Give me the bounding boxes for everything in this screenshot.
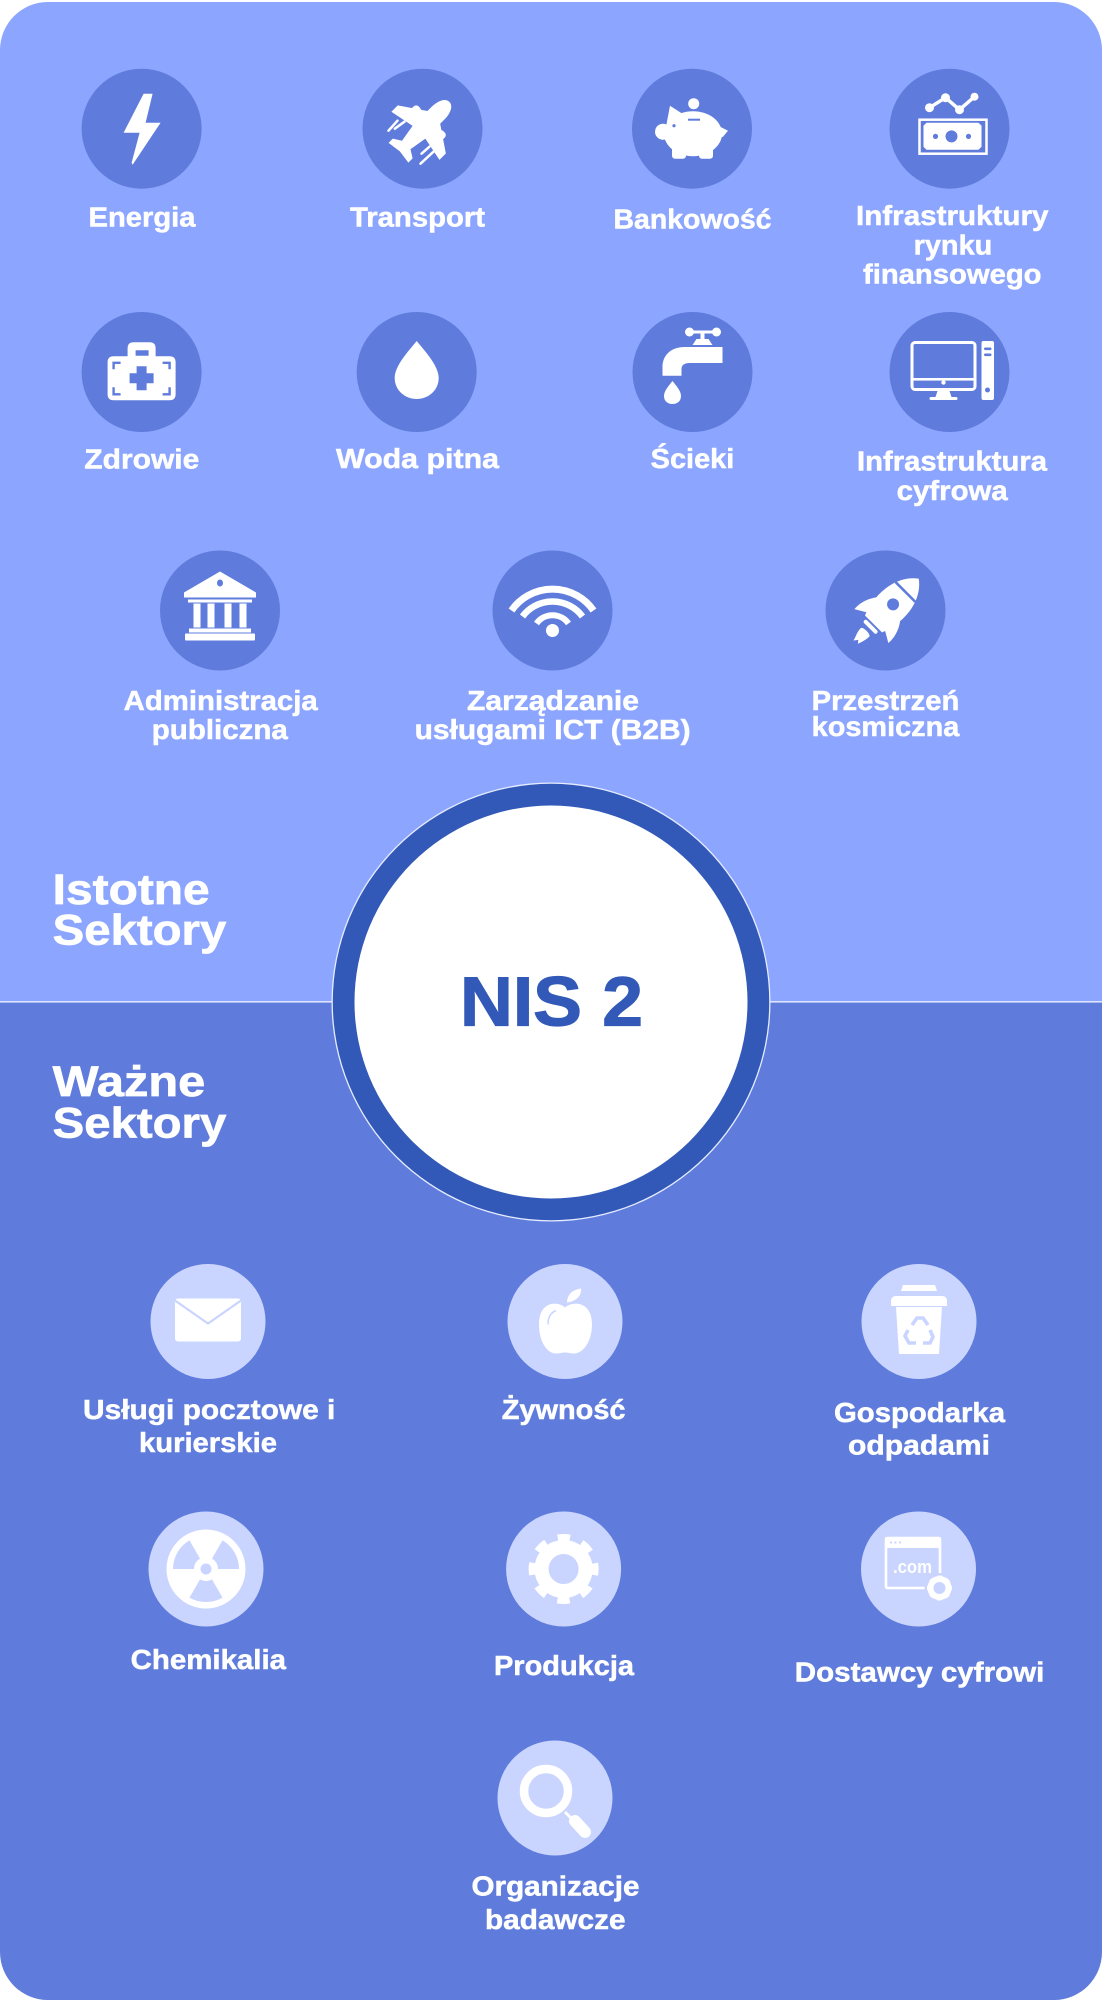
label: Zdrowie: Zdrowie xyxy=(84,444,199,475)
label: Usługi pocztowe i kurierskie: kurierskie xyxy=(139,1427,277,1458)
label: Organizacje badawcze: Organizacje xyxy=(472,1870,640,1901)
label: Gospodarka odpadami: odpadami xyxy=(848,1430,990,1461)
heading: Istotne Sektory: Istotne xyxy=(53,866,210,914)
icon: .com browser window with gear: .com xyxy=(893,1557,932,1577)
label: Organizacje badawcze xyxy=(472,1870,640,1935)
label: Zarządzanie usługami ICT (B2B): usługami ICT (B2B) xyxy=(415,714,691,745)
icon: medical kit xyxy=(108,342,176,400)
icon: radiation symbol xyxy=(166,1530,246,1608)
label: Bankowość: Bankowość xyxy=(614,204,772,235)
icon: lightning bolt xyxy=(124,94,161,165)
item: Ścieki xyxy=(632,312,752,474)
label: Usługi pocztowe i kurierskie xyxy=(83,1394,335,1458)
label: Infrastruktura cyfrowa: Infrastruktura xyxy=(857,446,1048,477)
item: Żywność xyxy=(502,1264,626,1425)
label: Infrastruktury rynku finansowego xyxy=(856,200,1049,290)
item: Przestrzeń kosmiczna xyxy=(812,550,960,742)
label: Usługi pocztowe i kurierskie: Usługi pocztowe i xyxy=(83,1394,335,1425)
item: Gospodarka odpadami xyxy=(834,1264,1006,1461)
icon: rocket xyxy=(838,562,936,659)
icon: public building xyxy=(184,572,256,640)
heading: Ważne Sektory xyxy=(53,1058,226,1148)
icon: recycling bin xyxy=(891,1285,947,1354)
item: Chemikalia xyxy=(131,1512,287,1675)
label: Zarządzanie usługami ICT (B2B) xyxy=(415,685,691,745)
label: Administracja publiczna xyxy=(124,685,318,745)
label: Dostawcy cyfrowi: Dostawcy cyfrowi xyxy=(795,1657,1044,1688)
item: Zdrowie xyxy=(82,312,202,475)
central badge: NIS 2 xyxy=(332,782,770,1222)
label: Woda pitna: Woda pitna xyxy=(336,443,500,474)
label: Przestrzeń kosmiczna xyxy=(812,685,960,742)
label: Infrastruktury rynku finansowego: Infrastruktury xyxy=(856,200,1049,231)
label: Przestrzeń kosmiczna: kosmiczna xyxy=(812,711,960,742)
icon: water drop xyxy=(395,341,439,399)
icon: envelope xyxy=(175,1298,241,1342)
label: Ścieki: Ścieki xyxy=(651,443,734,474)
label: Administracja publiczna: Administracja xyxy=(124,685,318,716)
icon: desktop computer xyxy=(912,341,994,400)
label: Infrastruktura cyfrowa xyxy=(857,446,1048,506)
item: Produkcja xyxy=(494,1512,635,1681)
item: Dostawcy cyfrowi xyxy=(795,1512,1044,1688)
icon: .com browser window with gear xyxy=(885,1537,954,1603)
label: Administracja publiczna: publiczna xyxy=(152,714,289,745)
icon: piggy bank xyxy=(655,98,728,159)
item: Transport xyxy=(350,69,485,233)
label: Energia: Energia xyxy=(88,202,196,233)
label: Transport: Transport xyxy=(350,202,485,233)
heading: Ważne Sektory: Sektory xyxy=(53,1100,226,1148)
icon: magnifying glass xyxy=(524,1769,585,1832)
item: Energia xyxy=(82,69,202,233)
icon: airplane xyxy=(374,78,473,177)
item: Administracja publiczna xyxy=(124,550,318,745)
label: Organizacje badawcze: badawcze xyxy=(485,1904,626,1935)
item: Organizacje badawcze xyxy=(472,1740,640,1935)
heading: Istotne Sektory xyxy=(53,866,226,955)
label: Przestrzeń kosmiczna: Przestrzeń xyxy=(812,685,959,716)
label: Infrastruktura cyfrowa: cyfrowa xyxy=(897,475,1008,506)
icon: banknote with trend line xyxy=(920,93,986,154)
heading: Istotne Sektory: Sektory xyxy=(53,907,226,955)
item: Bankowość xyxy=(614,69,772,235)
label: Chemikalia: Chemikalia xyxy=(131,1644,287,1675)
heading: Ważne Sektory: Ważne xyxy=(53,1058,205,1106)
label: Zarządzanie usługami ICT (B2B): Zarządzanie xyxy=(467,685,639,716)
icon: faucet xyxy=(662,328,722,404)
item: Usługi pocztowe i kurierskie xyxy=(83,1264,335,1458)
label: Gospodarka odpadami xyxy=(834,1397,1006,1461)
label: Gospodarka odpadami: Gospodarka xyxy=(834,1397,1006,1428)
item: Infrastruktury rynku finansowego xyxy=(856,69,1049,290)
panel: important sectors background xyxy=(0,1002,1102,2000)
label: Produkcja: Produkcja xyxy=(494,1650,635,1681)
label: Infrastruktury rynku finansowego: rynku xyxy=(914,229,992,260)
icon: apple xyxy=(539,1288,592,1354)
item: Zarządzanie usługami ICT (B2B) xyxy=(415,550,691,745)
title: NIS 2: NIS 2 xyxy=(460,962,643,1040)
icon: gear xyxy=(533,1538,595,1600)
label: Infrastruktury rynku finansowego: finansowego xyxy=(863,259,1042,290)
item: Infrastruktura cyfrowa xyxy=(857,312,1048,506)
icon: wifi signal xyxy=(512,589,594,637)
label: Żywność: Żywność xyxy=(502,1394,626,1425)
item: Woda pitna xyxy=(336,312,500,474)
panel: essential sectors background xyxy=(0,0,1102,1002)
